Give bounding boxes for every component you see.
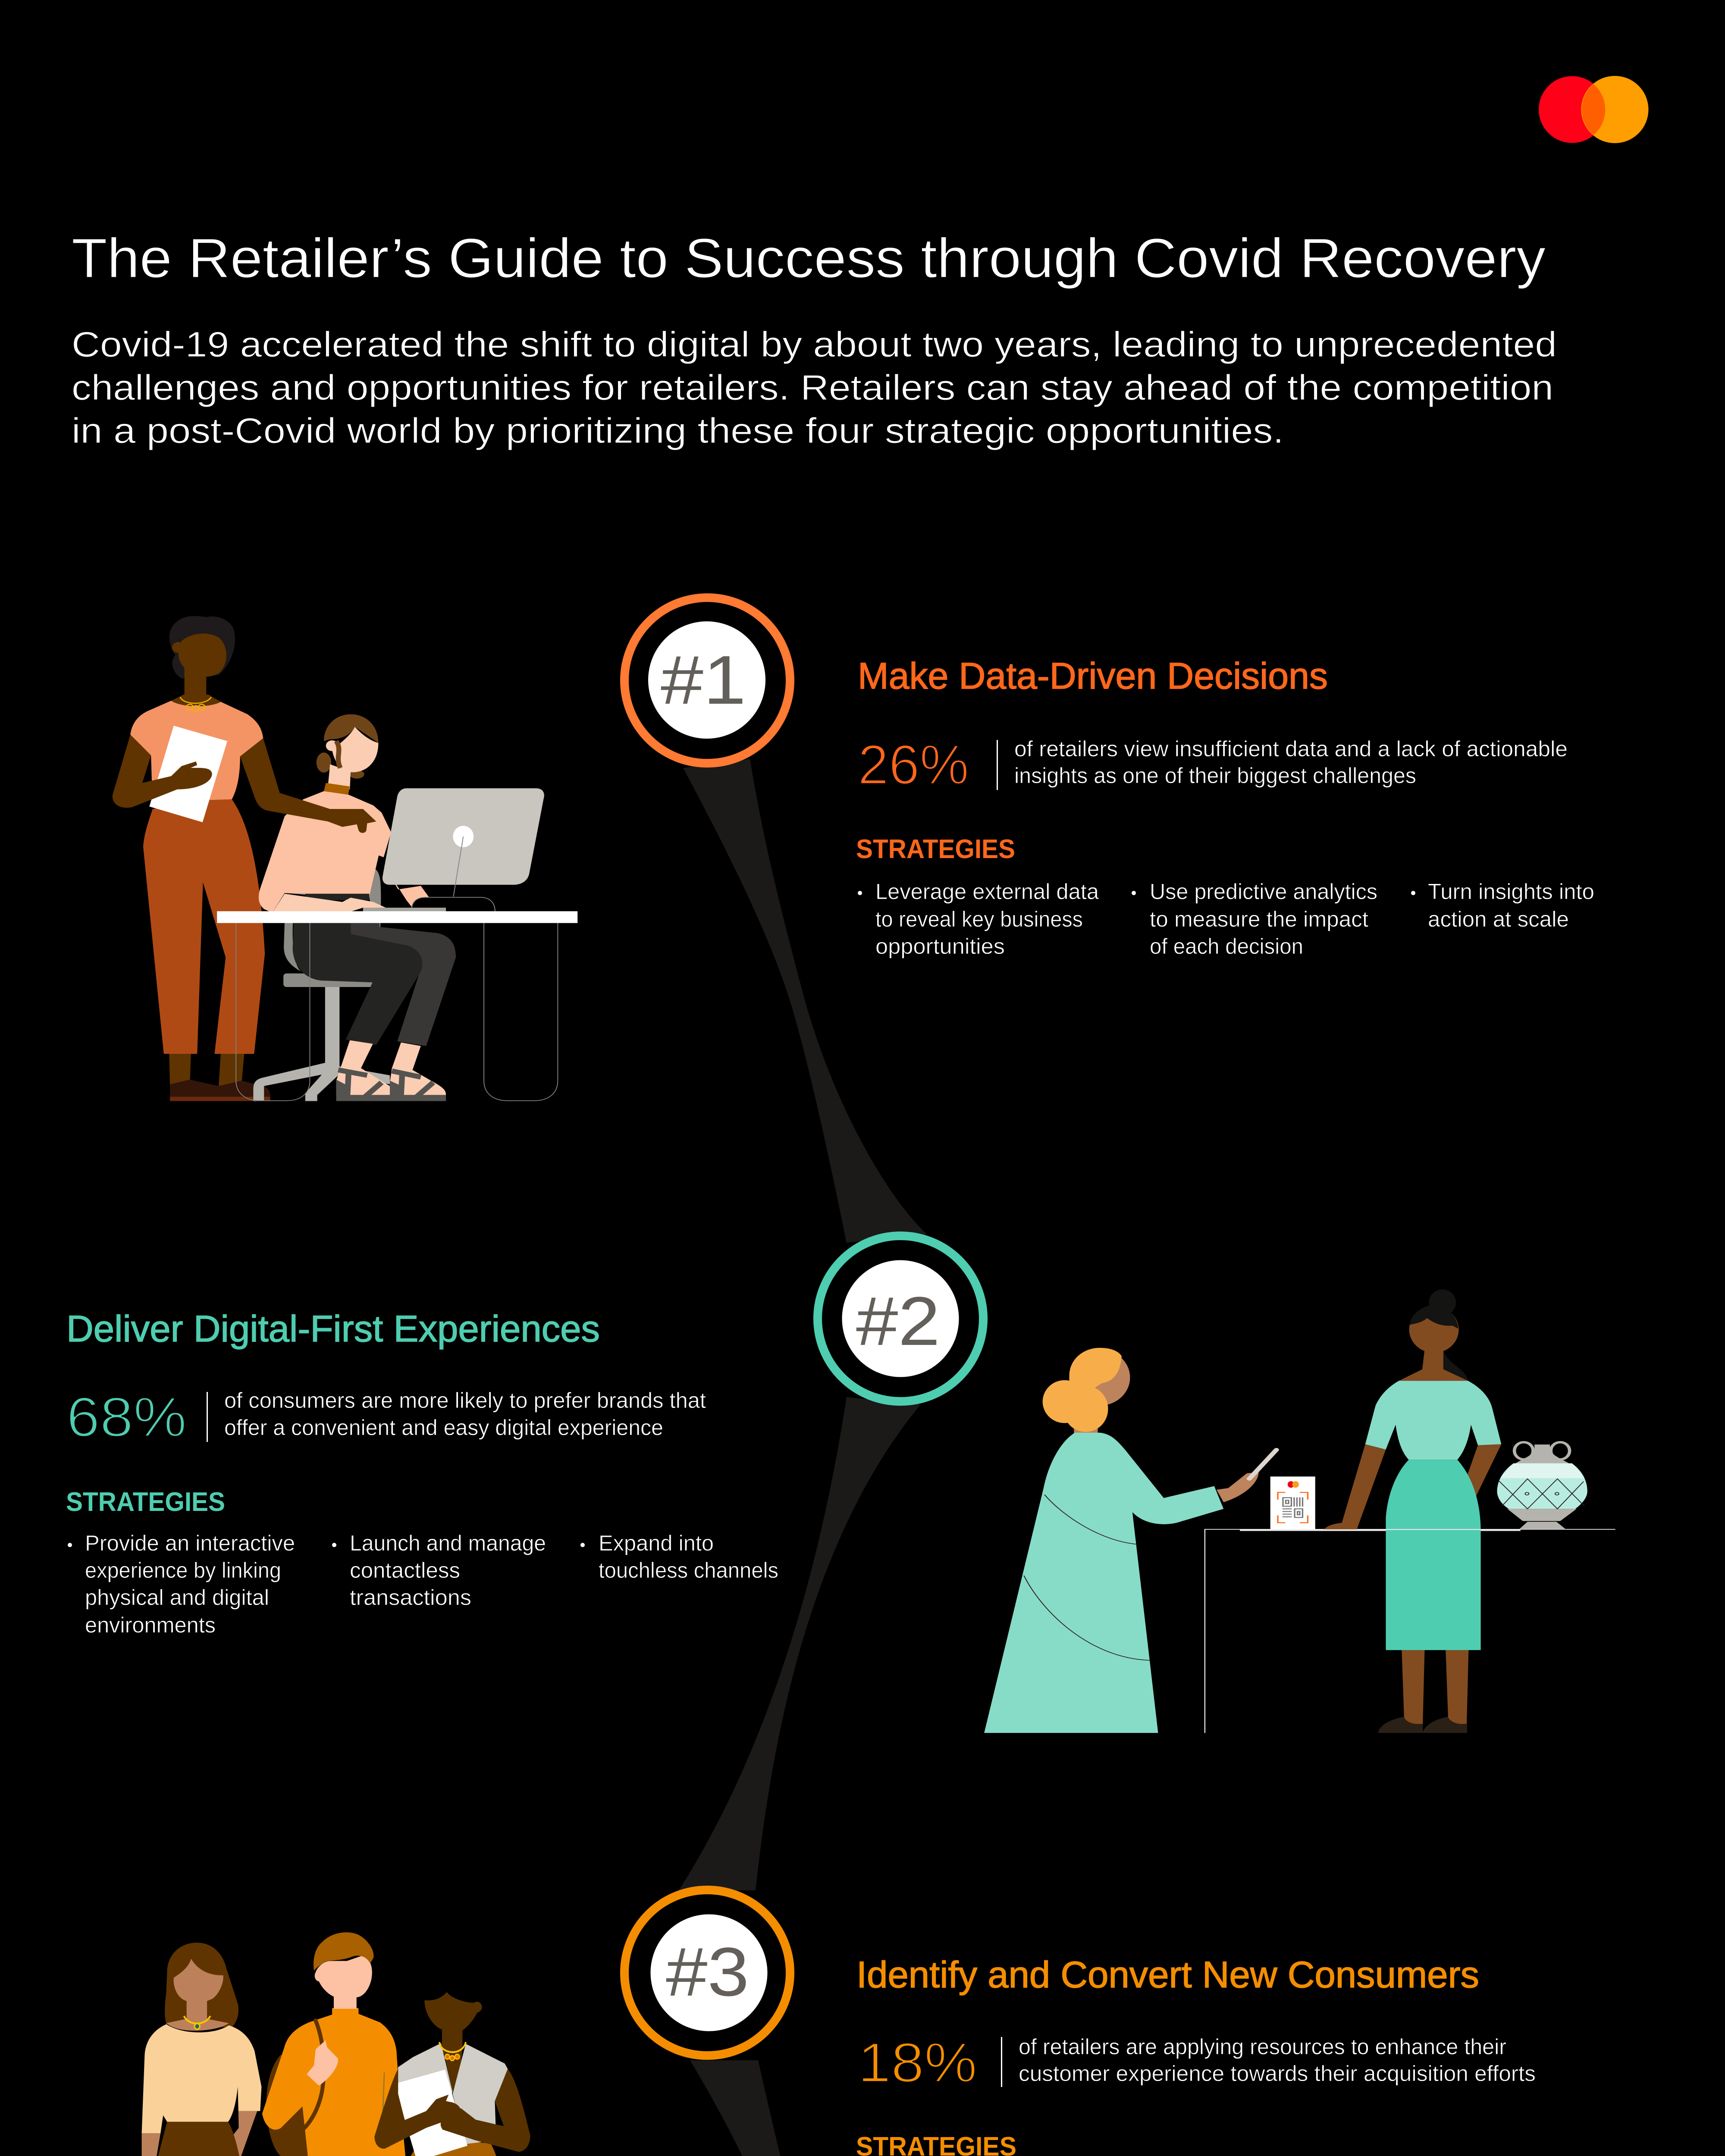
statistic description: of retailers view insufficient data and a lack of actionable (1014, 736, 1568, 761)
badge: number 3: #3 (666, 1933, 749, 2010)
counter (1205, 1529, 1615, 1733)
strategy: contactless transactions (332, 1531, 546, 1610)
intro paragraph (72, 324, 1557, 451)
statistic description: of retailers are applying resources to enhance their (1019, 2034, 1506, 2059)
strategy: predictive analytics (1132, 879, 1377, 959)
standing woman (113, 616, 270, 1101)
strategy: leverage external data: to reveal key business (875, 907, 1083, 931)
statistic description: of consumers are more likely to prefer brands that (224, 1388, 706, 1413)
badge: number 3 (624, 1890, 790, 2056)
logo: Mastercard circles (1539, 76, 1648, 143)
illustration: group of three young consumers (137, 1932, 530, 2156)
statistic 26%: 26% (858, 733, 969, 796)
strategy: interactive experience: Provide an interactive (85, 1531, 295, 1555)
strategy: predictive analytics: of each decision (1150, 934, 1303, 959)
strategy: contactless transactions: Launch and manage (350, 1531, 546, 1555)
strategy: insights into action: action at scale (1428, 907, 1569, 931)
panel: identify and convert new consumers (856, 1954, 1536, 2156)
statistic description: customer experience towards their acquisition efforts (1019, 2061, 1536, 2086)
statistic description (1014, 736, 1568, 788)
panel: deliver digital-first experiences (66, 1308, 778, 1637)
statistic description (1019, 2034, 1536, 2086)
customer in long dress (984, 1348, 1276, 1733)
badge: number 1 (624, 598, 790, 763)
strategy: leverage external data: Leverage external data (875, 879, 1099, 904)
strategy: insights into action: Turn insights into (1428, 879, 1594, 904)
divider (997, 740, 998, 790)
intro paragraph: in a post-Covid world by prioritizing these four strategic opportunities. (72, 411, 1284, 451)
shop assistant (1324, 1289, 1501, 1733)
heading: Identify and Convert New Consumers (856, 1954, 1479, 1996)
strategies heading: STRATEGIES (66, 1487, 225, 1517)
badge: number 2: #2 (856, 1282, 940, 1360)
heading: Deliver Digital-First Experiences (66, 1308, 600, 1350)
statistic 18%: 18% (858, 2031, 977, 2094)
strategy: predictive analytics: to measure the impact (1150, 907, 1368, 931)
strategy: interactive experience: physical and digital (85, 1585, 269, 1610)
seated woman (259, 714, 456, 1101)
title: The Retailer’s Guide to Success through Covid Recovery (72, 227, 1546, 289)
strategy: interactive experience (68, 1531, 295, 1637)
man with backpack and prosthetic leg (262, 1932, 406, 2156)
laptop (363, 788, 544, 912)
strategy: leverage external data: opportunities (875, 934, 1005, 959)
illustration: customer scanning QR code at a shop counter (984, 1289, 1615, 1733)
strategy: insights into action (1411, 879, 1594, 931)
strategy: contactless transactions: contactless (350, 1558, 460, 1583)
strategies heading: STRATEGIES (856, 834, 1015, 864)
badge: number 1: #1 (661, 641, 746, 718)
statistic description (224, 1388, 706, 1440)
strategy: predictive analytics: Use predictive analytics (1150, 879, 1377, 904)
intro paragraph: Covid-19 accelerated the shift to digital by about two years, leading to unprecedented (72, 324, 1557, 364)
strategy: touchless channels: Expand into (599, 1531, 714, 1555)
illustration: two women at a desk with laptop (113, 616, 577, 1101)
woman in cream top (137, 1943, 261, 2156)
statistic 68%: 68% (66, 1385, 187, 1448)
divider (207, 1392, 208, 1442)
statistic description: insights as one of their biggest challenges (1014, 763, 1416, 788)
strategy: leverage external data (858, 879, 1099, 959)
connecting spine between the numbered circles (679, 759, 928, 2156)
intro paragraph: challenges and opportunities for retailers. Retailers can stay ahead of the competition (72, 367, 1553, 407)
desk (217, 911, 577, 1101)
pointing arm (240, 738, 376, 833)
strategy: interactive experience: experience by linking (85, 1558, 281, 1583)
woman holding papers (374, 1992, 530, 2156)
strategy: interactive experience: environments (85, 1613, 216, 1637)
strategy: touchless channels: touchless channels (599, 1558, 778, 1583)
chair (253, 863, 390, 1101)
statistic description: offer a convenient and easy digital experience (224, 1415, 663, 1440)
QR code stand (1270, 1476, 1315, 1529)
panel: make data-driven decisions (856, 655, 1594, 959)
strategy: touchless channels (580, 1531, 778, 1583)
divider (1001, 2037, 1002, 2087)
badge: number 2 (818, 1236, 983, 1401)
strategy: contactless transactions: transactions (350, 1585, 471, 1610)
decorative vase (1497, 1442, 1587, 1529)
heading: Make Data-Driven Decisions (858, 655, 1328, 697)
